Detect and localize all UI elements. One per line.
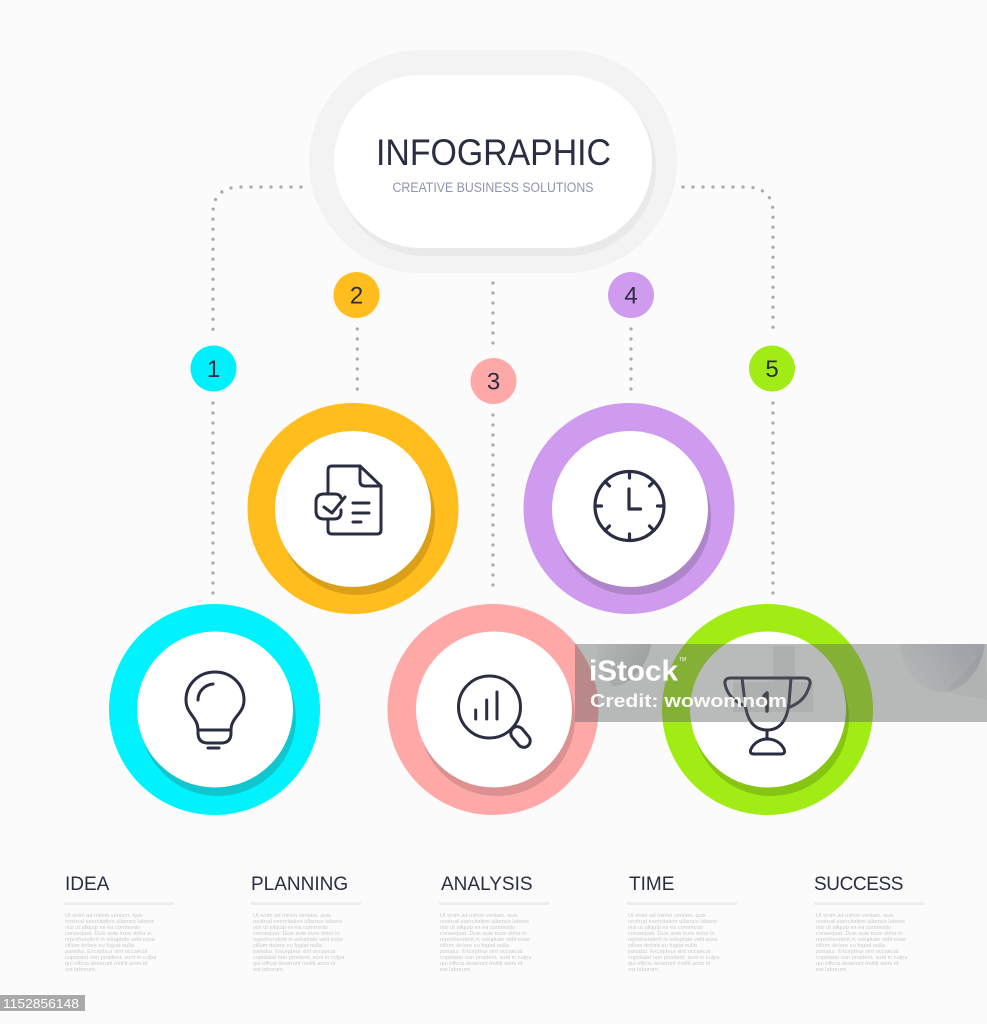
column: success: Ut enim ad minim veniam, quis: [816, 913, 894, 919]
column: analysis: nostrud exercitation ullamco laboris: [440, 919, 529, 925]
column: idea: est laborum.: [65, 967, 96, 973]
column: time: est laborum.: [628, 967, 659, 973]
column: time: Ut enim ad minim veniam, quis: [628, 913, 706, 919]
badge 4: 4: [624, 282, 638, 310]
column: analysis: [439, 874, 549, 973]
column: time: TIME: [629, 874, 674, 895]
column: idea: [64, 874, 174, 973]
column: planning: pariatur. Excepteur sint occaecat: [253, 949, 336, 955]
icon: clock: [595, 472, 664, 540]
column: idea: nostrud exercitation ullamco laboris: [65, 919, 154, 925]
column: planning: cillum dolore eu fugiat nulla: [253, 943, 322, 949]
column: planning: reprehenderit in voluptate velit esse: [253, 937, 343, 943]
column: idea: nisi ut aliquip ex ea commodo: [65, 925, 140, 931]
column: idea: cillum dolore eu fugiat nulla: [65, 943, 134, 949]
ring 1: idea: [109, 604, 320, 815]
column: planning: [251, 874, 361, 973]
column: success: qui officia deserunt mollit anim id: [816, 961, 898, 967]
column: success: pariatur. Excepteur sint occaecat: [816, 949, 899, 955]
column: time: reprehenderit in voluptate velit esse: [628, 937, 718, 943]
ring 2: planning: [248, 403, 458, 614]
column: time: pariatur. Excepteur sint occaecat: [628, 949, 711, 955]
watermark band: [575, 644, 987, 722]
column: analysis: nisi ut aliquip ex ea commodo: [440, 925, 515, 931]
column: planning: cupidatat non proident, sunt in culpa: [253, 955, 344, 961]
column: idea: qui officia deserunt mollit anim id: [65, 961, 147, 967]
column: idea: IDEA: [65, 874, 109, 895]
column: success: cupidatat non proident, sunt in culpa: [816, 955, 907, 961]
column: success: SUCCESS: [814, 874, 903, 895]
column: planning: Ut enim ad minim veniam, quis: [253, 913, 331, 919]
column: analysis: pariatur. Excepteur sint occaecat: [440, 949, 523, 955]
column: idea: pariatur. Excepteur sint occaecat: [65, 949, 148, 955]
badge 5: 5: [765, 356, 779, 383]
badge 3: [470, 358, 516, 404]
column: planning: est laborum.: [253, 967, 284, 973]
column: analysis: cillum dolore eu fugiat nulla: [440, 943, 509, 949]
ring 3: analysis: [388, 604, 598, 815]
badge 5: [749, 346, 795, 392]
column: success: cillum dolore eu fugiat nulla: [816, 943, 885, 949]
dotted connectors: [213, 187, 773, 598]
column: planning: qui officia deserunt mollit anim id: [253, 961, 335, 967]
image id tag: 1152856148: [3, 997, 79, 1011]
column: time: nisi ut aliquip ex ea commodo: [628, 925, 703, 931]
column: idea: Ut enim ad minim veniam, quis: [65, 913, 143, 919]
badge 1: 1: [207, 356, 220, 383]
watermark trademark: TM: [679, 657, 686, 663]
column: analysis: est laborum.: [440, 967, 471, 973]
column: analysis: reprehenderit in voluptate velit esse: [440, 937, 530, 943]
ring 5: success: [662, 604, 873, 815]
watermark logo: iStock: [589, 656, 679, 688]
column: analysis: consequat. Duis aute irure dolor in: [440, 931, 527, 937]
column: success: nostrud exercitation ullamco laboris: [816, 919, 905, 925]
column: analysis: Ut enim ad minim veniam, quis: [440, 913, 518, 919]
icon: magnifier with bars: [458, 676, 533, 750]
subtitle: CREATIVE BUSINESS SOLUTIONS: [392, 180, 594, 195]
badge 4: [608, 272, 654, 318]
badge 1: [190, 346, 236, 392]
watermark credit: Credit: wowomnom: [590, 690, 787, 711]
badge 3: 3: [487, 368, 500, 396]
title pill: [309, 50, 677, 273]
column: success: est laborum.: [816, 967, 847, 973]
column: time: cupidatat non proident, sunt in culpa: [628, 955, 719, 961]
column: success: nisi ut aliquip ex ea commodo: [816, 925, 891, 931]
badge 2: 2: [350, 282, 363, 310]
column: analysis: ANALYSIS: [441, 874, 533, 895]
column: idea: cupidatat non proident, sunt in culpa: [65, 955, 156, 961]
column: analysis: cupidatat non proident, sunt in culpa: [440, 955, 531, 961]
column: analysis: qui officia deserunt mollit anim id: [440, 961, 522, 967]
icon: trophy: [725, 678, 810, 754]
column: success: consequat. Duis aute irure dolor in: [816, 931, 903, 937]
title: INFOGRAPHIC: [376, 132, 611, 173]
column: success: reprehenderit in voluptate velit esse: [816, 937, 906, 943]
column: planning: PLANNING: [251, 874, 348, 895]
column: planning: nisi ut aliquip ex ea commodo: [253, 925, 328, 931]
ring 4: time: [524, 403, 734, 614]
column: idea: reprehenderit in voluptate velit esse: [65, 937, 155, 943]
icon: document checklist: [316, 466, 381, 534]
column: idea: consequat. Duis aute irure dolor in: [65, 931, 152, 937]
column: planning: consequat. Duis aute irure dolor in: [253, 931, 340, 937]
column: time: nostrud exercitation ullamco laboris: [628, 919, 717, 925]
column: time: qui officia deserunt mollit anim id: [628, 961, 710, 967]
column: success: [814, 874, 924, 973]
column: planning: nostrud exercitation ullamco laboris: [253, 919, 342, 925]
column: time: [627, 874, 737, 973]
column: time: consequat. Duis aute irure dolor in: [628, 931, 715, 937]
column: time: cillum dolore eu fugiat nulla: [628, 943, 697, 949]
icon: light bulb: [186, 672, 244, 748]
badge 2: [334, 272, 380, 318]
